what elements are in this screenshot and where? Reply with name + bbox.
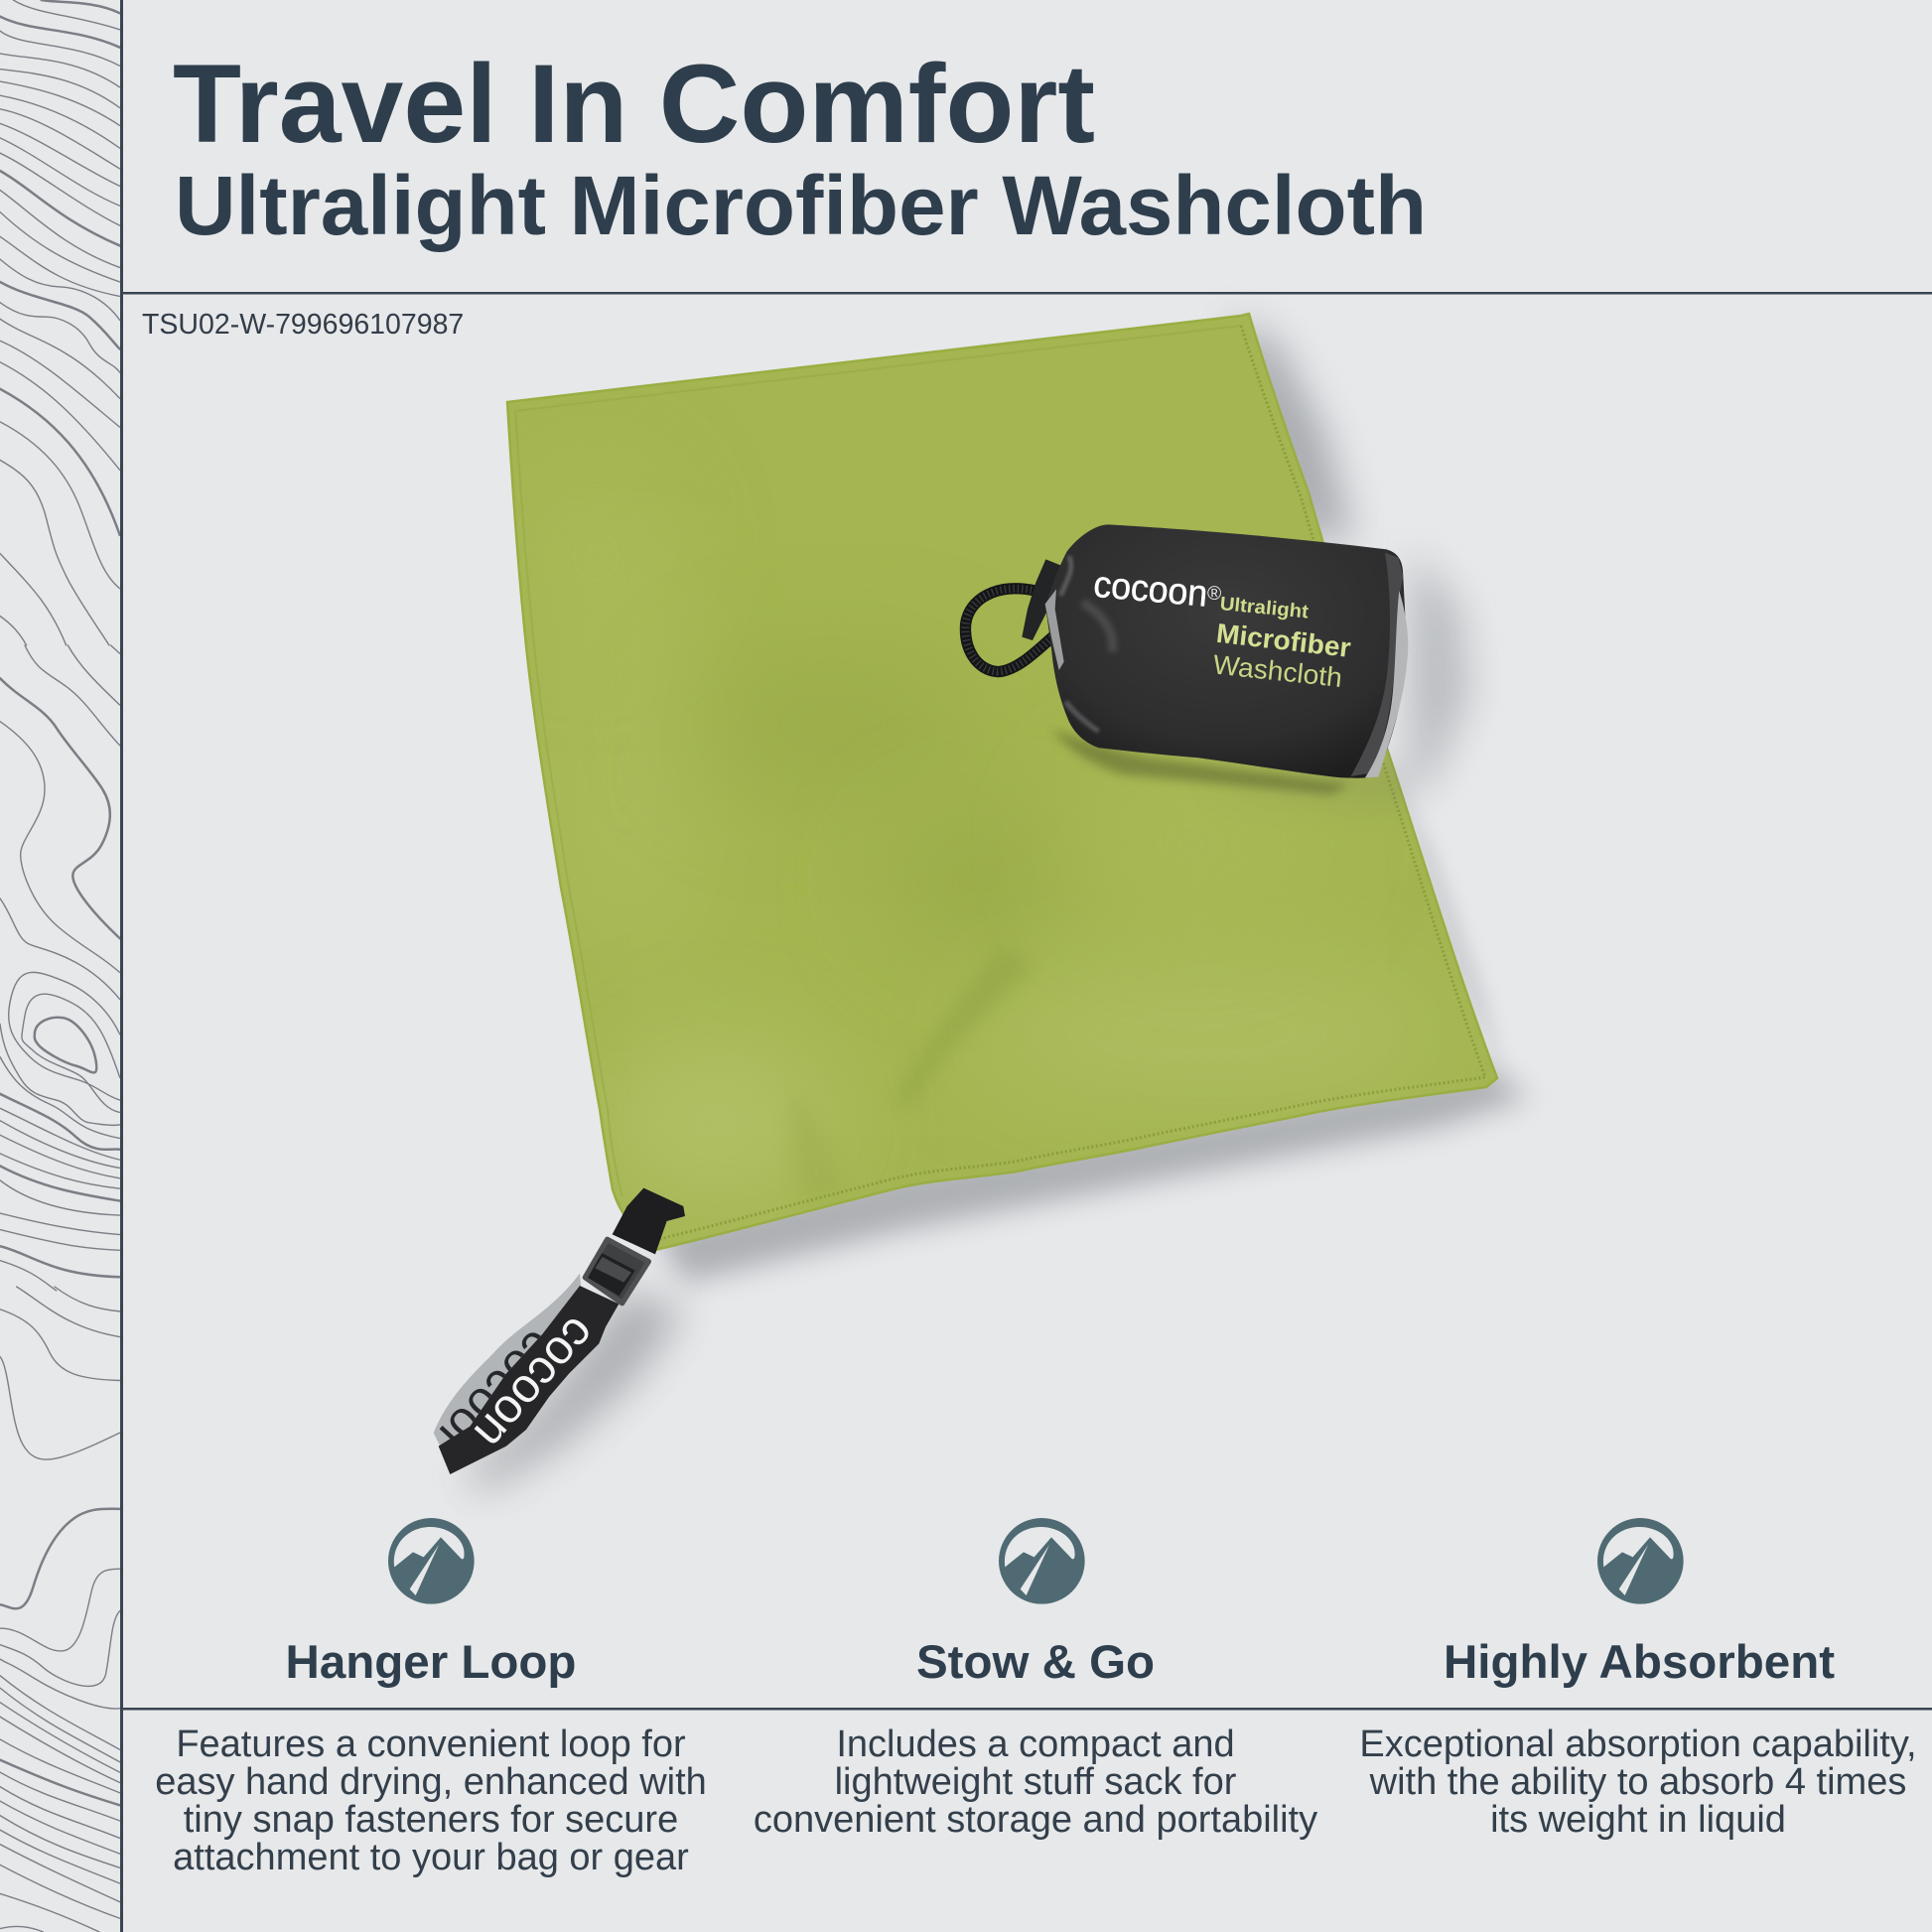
sack neck folds — [1045, 556, 1113, 732]
heading: Highly Absorbent — [1444, 1636, 1835, 1689]
stitching: top and left — [515, 326, 1241, 1196]
description: lightweight stuff sack for — [835, 1761, 1237, 1803]
feature: Highly Absorbent — [1359, 1518, 1917, 1841]
topographic contour sidebar — [0, 0, 120, 1932]
description: convenient storage and portability — [754, 1799, 1317, 1841]
title: Travel In Comfort — [173, 42, 1095, 166]
heading: Hanger Loop — [286, 1636, 576, 1689]
description: with the ability to absorb 4 times — [1369, 1761, 1906, 1803]
stitching: right and bottom — [659, 326, 1485, 1239]
sack light gauze — [1365, 591, 1408, 777]
description: its weight in liquid — [1490, 1799, 1786, 1841]
description: attachment to your bag or gear — [173, 1837, 689, 1878]
stuff sack shadow — [1052, 551, 1469, 794]
description: Exceptional absorption capability, — [1359, 1724, 1917, 1765]
strap front side — [439, 1286, 619, 1474]
hanger strap shadow — [462, 1291, 685, 1489]
sack label: Washcloth: Washcloth — [1211, 648, 1344, 693]
description: Includes a compact and — [836, 1724, 1235, 1765]
hanger loop strap: cocoon — [418, 1319, 567, 1473]
feature: Stow & Go — [754, 1518, 1317, 1841]
sack label: Microfiber: Microfiber — [1215, 618, 1353, 663]
sack label: Ultralight: Ultralight — [1219, 594, 1310, 623]
sack end gathers — [1351, 553, 1403, 776]
sack registered mark: ® — [1207, 584, 1221, 605]
sack logo: cocoon — [1092, 563, 1209, 615]
strap logo: cocoon — [464, 1307, 607, 1459]
icon: mountain badge — [388, 1518, 475, 1604]
hanger loop strap — [418, 1188, 685, 1474]
snap tab — [613, 1188, 685, 1254]
icon: mountain badge — [1597, 1518, 1684, 1604]
subtitle: Ultralight Microfiber Washcloth — [175, 159, 1427, 252]
snap buckle — [585, 1239, 648, 1304]
towel — [507, 314, 1497, 1250]
strap back side — [434, 1274, 581, 1447]
stuff sack — [965, 524, 1408, 778]
description: easy hand drying, enhanced with — [155, 1761, 707, 1803]
drawcord loop — [965, 589, 1052, 672]
description: tiny snap fasteners for secure — [184, 1799, 678, 1841]
cord toggle — [1022, 559, 1060, 640]
heading: Stow & Go — [916, 1636, 1155, 1689]
icon: mountain badge — [999, 1518, 1085, 1604]
product code: TSU02-W-799696107987 — [142, 309, 464, 341]
sack body — [1045, 524, 1407, 778]
description: Features a convenient loop for — [176, 1724, 686, 1765]
feature: Hanger Loop — [155, 1518, 707, 1878]
towel shadow — [655, 318, 1529, 1283]
